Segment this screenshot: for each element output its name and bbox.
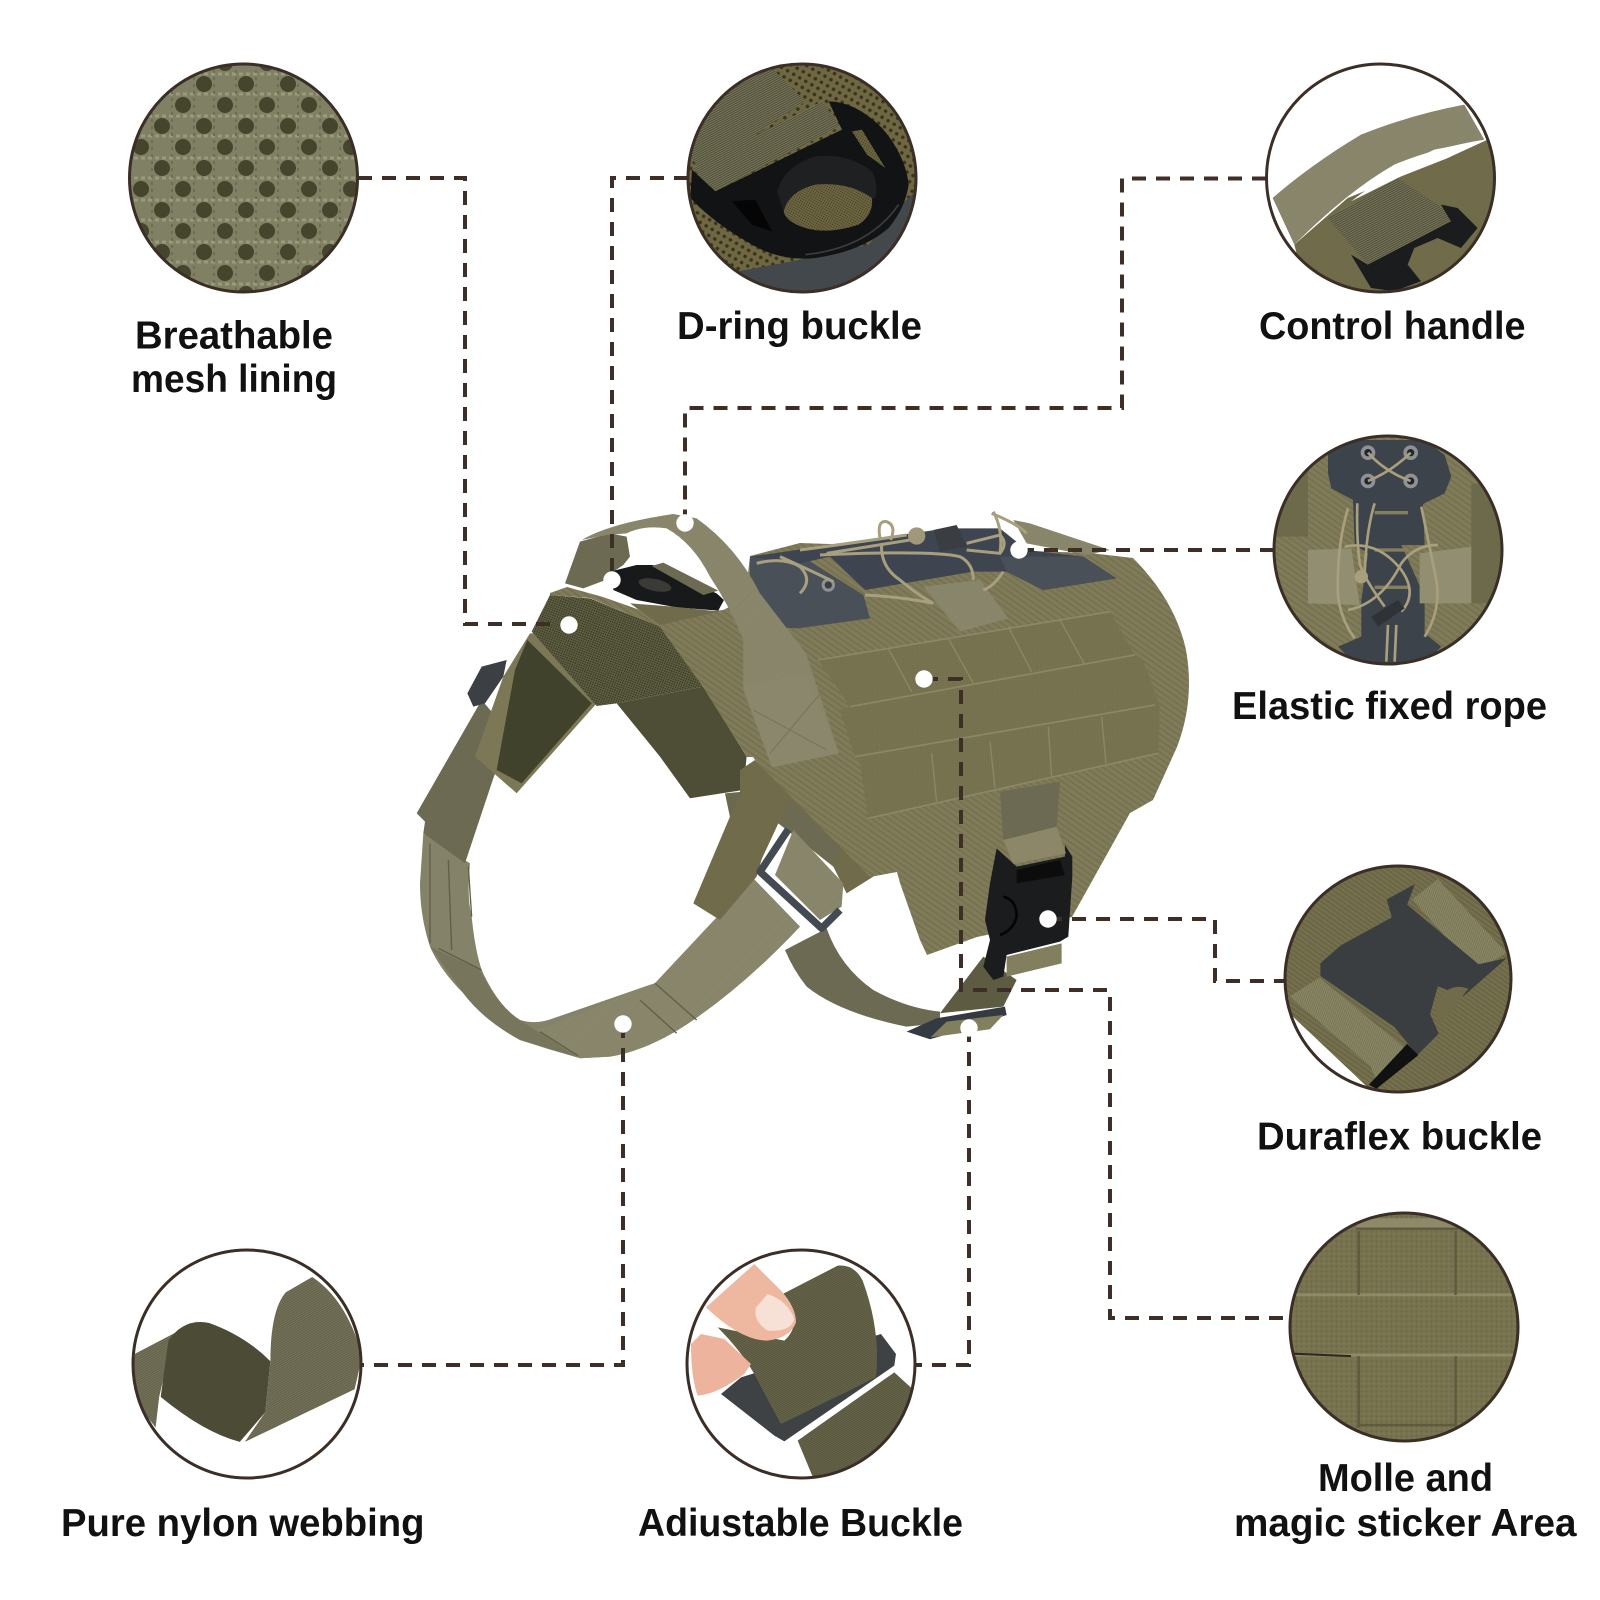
- top strap and elastic cords: [757, 512, 1110, 632]
- mesh detail image: [130, 64, 358, 292]
- padded leg section: [693, 763, 787, 920]
- handle underside: [565, 533, 630, 588]
- heading: duraflex buckle: Duraflex buckle: [1257, 1116, 1542, 1158]
- rear leg strap: [785, 928, 940, 1027]
- panel: molle and magic sticker area: [1290, 1213, 1519, 1441]
- heading: molle and magic sticker area: magic sticker Area: [1234, 1502, 1577, 1545]
- panel: duraflex buckle: [1274, 866, 1511, 1101]
- handle strap on top of body: [582, 514, 839, 767]
- dashed leader: duraflex buckle: [1048, 919, 1285, 981]
- harness product illustration: [417, 512, 1189, 1058]
- dashed leader: D-ring buckle: [612, 178, 688, 580]
- panel: adjustable buckle: [687, 1250, 915, 1481]
- dashed leader: control handle: [685, 178, 1266, 522]
- blue-grey plates: [750, 528, 1117, 628]
- heading: control handle: Control handle: [1259, 305, 1526, 348]
- velcro panel rows: [818, 612, 1160, 818]
- harness main body: [550, 543, 1189, 955]
- panel: D-ring buckle: [680, 60, 920, 300]
- collar strap upper section and tab: [417, 660, 510, 863]
- under-fabric beside slider: [740, 760, 873, 893]
- dashed leader: molle area: [924, 679, 1290, 1318]
- heading: D-ring buckle: D-ring buckle: [677, 305, 922, 348]
- front lining with flap and mesh: [475, 595, 747, 798]
- callout anchor dots: [560, 514, 1057, 1037]
- dashed leader: breathable mesh lining: [358, 178, 557, 624]
- collar strap ring: [420, 833, 800, 1058]
- heading: breathable mesh lining: mesh lining: [131, 358, 337, 401]
- heading: pure nylon webbing: Pure nylon webbing: [61, 1502, 424, 1545]
- dashed leader: pure nylon webbing: [361, 1024, 623, 1365]
- panel: control handle: [1266, 64, 1501, 298]
- side slider with strap: [760, 800, 843, 928]
- panel: breathable mesh lining: [130, 64, 358, 292]
- chest strap and buckles: [907, 782, 1072, 1039]
- heading: adjustable buckle: Adiustable Buckle: [638, 1502, 963, 1545]
- dashed leader: elastic fixed rope: [1019, 548, 1274, 552]
- heading: breathable mesh lining: Breathable: [135, 314, 333, 358]
- D-ring on harness: [610, 563, 727, 625]
- panel: elastic fixed rope: [1274, 436, 1502, 664]
- heading: elastic fixed rope: Elastic fixed rope: [1232, 685, 1547, 728]
- panel: pure nylon webbing: [128, 1250, 362, 1478]
- dashed leader: adjustable buckle: [915, 1028, 969, 1365]
- heading: molle and magic sticker area: Molle and: [1318, 1457, 1493, 1500]
